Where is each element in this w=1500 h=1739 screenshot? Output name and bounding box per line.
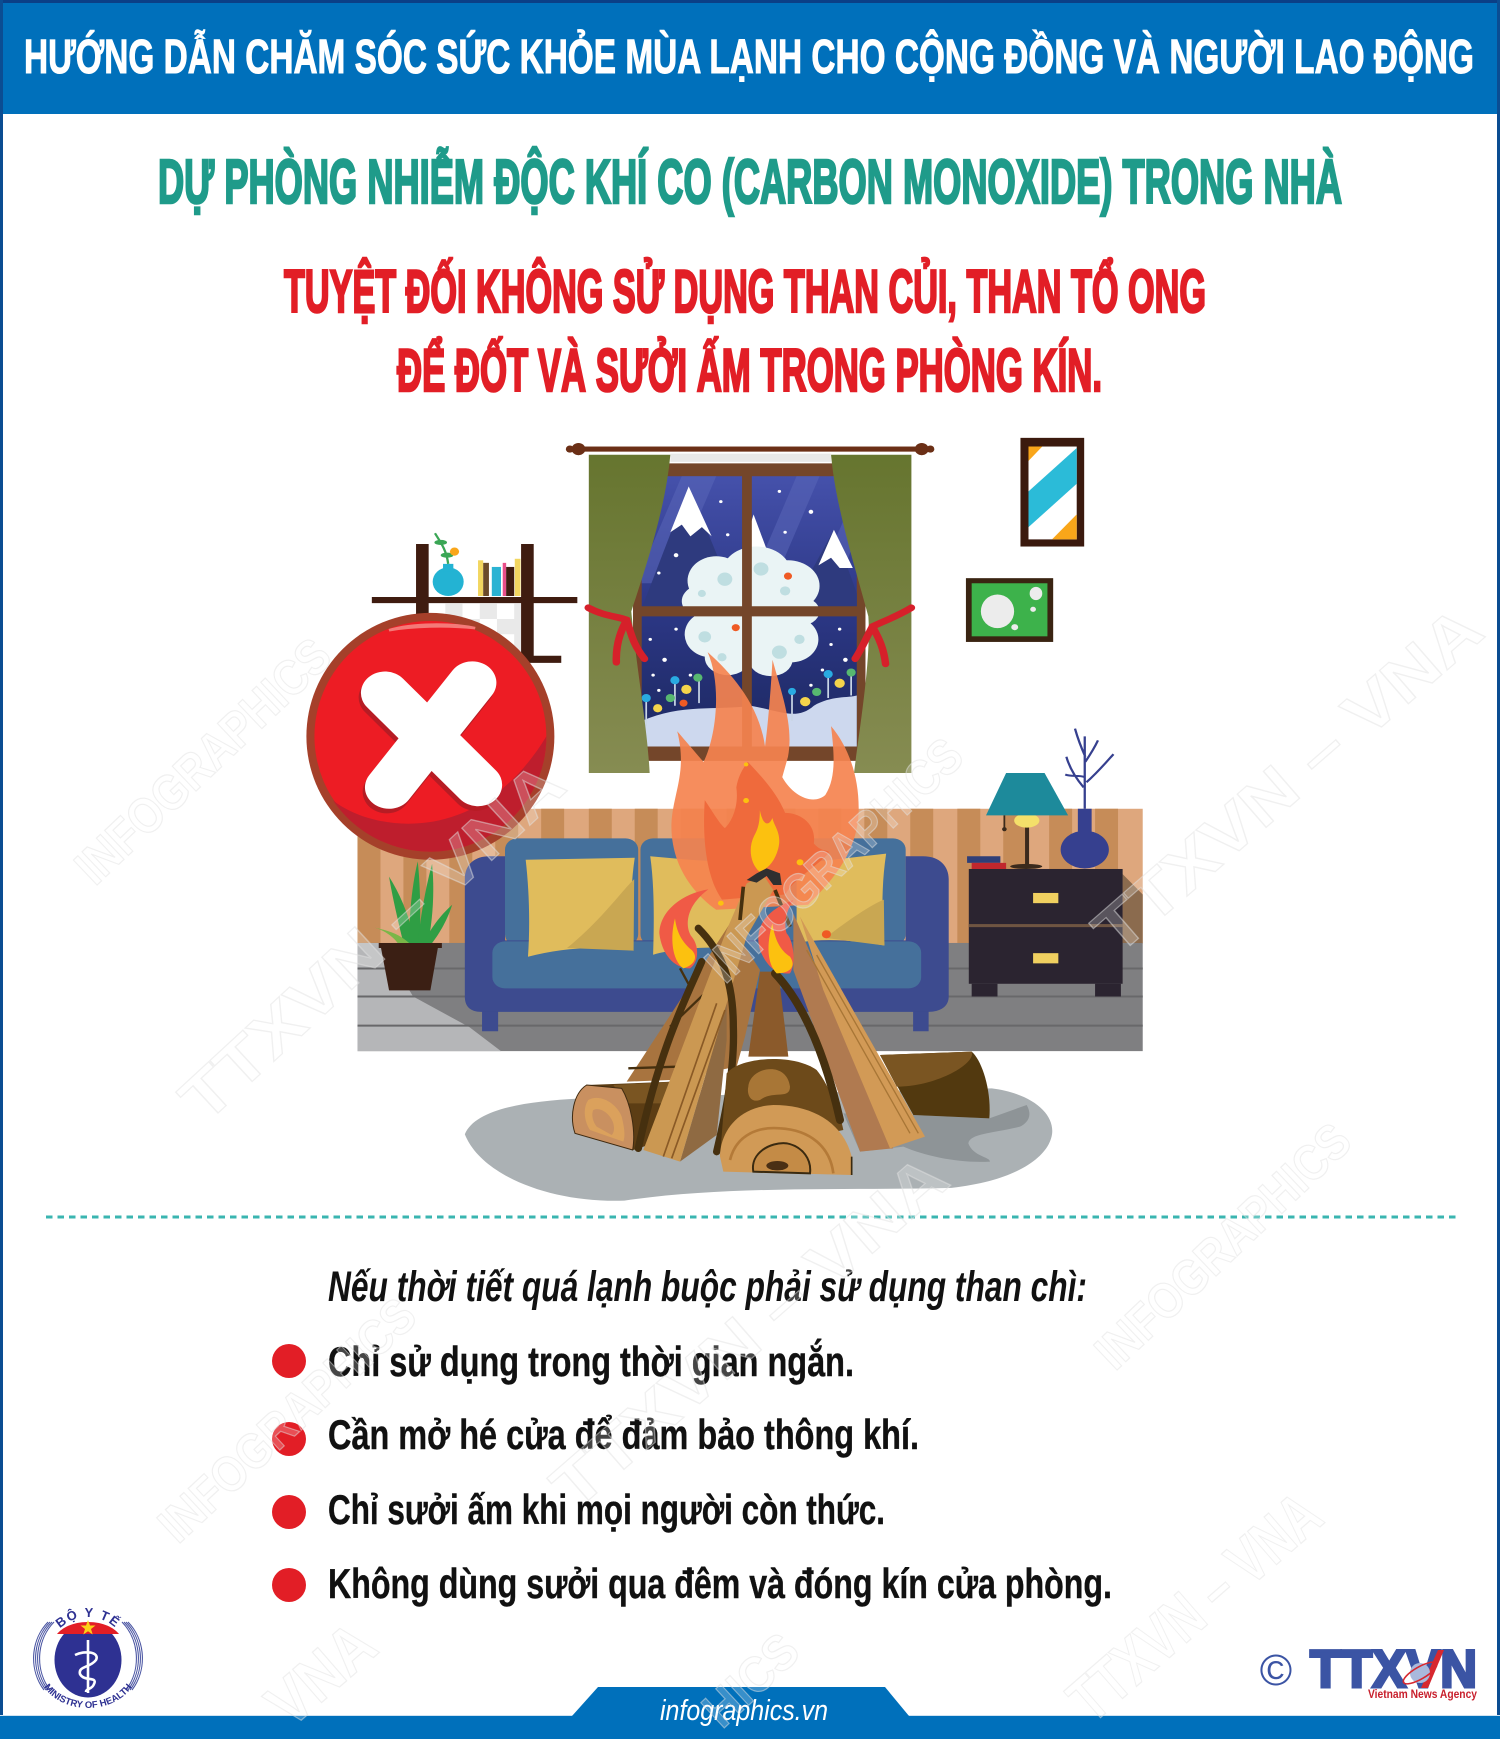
advice list — [272, 1337, 1112, 1607]
back-left pole — [627, 923, 760, 1082]
item 3 — [272, 1486, 885, 1533]
books on nightstand — [967, 856, 1000, 863]
prohibition sign — [306, 613, 554, 860]
illustration: living room — [306, 438, 1143, 1201]
watermarks: VNA — [252, 1607, 390, 1739]
nightstand — [969, 869, 1143, 997]
watermarks: TTXVN – VNA — [537, 1140, 962, 1523]
logo: ministry of health: BỘ Y TẾ — [55, 1608, 122, 1628]
table lamp — [986, 773, 1068, 869]
logo: TTXVN: © — [1260, 1646, 1292, 1695]
curtain rod — [566, 443, 934, 455]
floor — [357, 943, 1143, 1051]
footer band — [0, 1687, 1500, 1739]
wall stripes — [357, 809, 1143, 944]
curtain ties — [588, 608, 911, 664]
vase with branches — [1061, 729, 1113, 868]
small left flame — [659, 889, 708, 968]
woodpile and small flames — [573, 868, 1029, 1175]
item 3: Chỉ sưởi ấm khi mọi người còn thức. — [328, 1486, 885, 1533]
watermarks: TTXVN – VNA — [1054, 1478, 1335, 1736]
watermarks: INFOGRAPHICS — [64, 627, 342, 895]
wall shelf — [372, 533, 577, 663]
small right flame — [758, 900, 794, 974]
top dark edge — [740, 887, 790, 927]
warning headline — [284, 258, 1206, 404]
left plank — [643, 875, 773, 1162]
pillows — [526, 858, 635, 957]
left curtain — [589, 455, 670, 773]
watermarks: TTXVN – VNA — [166, 747, 578, 1135]
right curtain — [831, 455, 911, 773]
item 4: Không dùng sưởi qua đêm và đóng kín cửa phòng. — [328, 1560, 1112, 1607]
tree — [682, 547, 820, 676]
center dark stick — [698, 928, 733, 1152]
flame: core — [751, 810, 779, 872]
sparks — [718, 762, 831, 938]
watermarks: INFOGRAPHICS — [1084, 1112, 1362, 1380]
window — [633, 463, 871, 761]
left stick — [638, 962, 702, 1148]
thin branch — [628, 968, 710, 1068]
back log — [880, 1052, 990, 1118]
header band — [0, 0, 1500, 114]
watermarks: TTXVN – VNA — [1079, 592, 1496, 968]
watermarks: INFOGRAPHICS — [147, 1287, 427, 1553]
left log — [573, 1082, 673, 1150]
books — [478, 559, 521, 596]
logo: ministry of health: MINISTRY OF HEALTH — [44, 1683, 132, 1708]
rug — [465, 1088, 1052, 1201]
rug shadow — [843, 1105, 1029, 1162]
right plank — [793, 913, 925, 1152]
plant pot — [375, 861, 452, 990]
green picture frame — [966, 578, 1053, 642]
burnt tip — [747, 868, 782, 885]
dotted divider — [46, 1216, 1456, 1218]
flame: middle — [704, 762, 829, 900]
center log — [720, 1059, 852, 1175]
logo: ministry of health — [33, 1608, 143, 1708]
logo: TTXVN: Vietnam News Agency — [1368, 1687, 1477, 1701]
snow and trees — [642, 696, 857, 747]
website: infographics.vn — [660, 1695, 828, 1727]
small red books — [972, 863, 1006, 869]
right dark stick — [775, 973, 840, 1120]
item 2: Cần mở hé cửa để đảm bảo thông khí. — [328, 1411, 919, 1458]
mirror frame — [1020, 438, 1084, 547]
curtain tabs — [670, 454, 831, 462]
vase and plant — [433, 533, 464, 596]
list intro: Nếu thời tiết quá lạnh buộc phải sử dụng than chì: — [328, 1263, 1087, 1311]
sofa — [465, 838, 949, 1031]
watermarks: HICS — [691, 1622, 810, 1738]
center pole — [748, 972, 788, 1057]
item 1: Chỉ sử dụng trong thời gian ngắn. — [328, 1337, 854, 1385]
watermarks — [64, 592, 1496, 1739]
watermarks: INFOGRAPHICS — [694, 727, 974, 993]
logo: TTXVN: TTXVN — [1310, 1640, 1477, 1699]
flame: outer — [671, 652, 859, 910]
